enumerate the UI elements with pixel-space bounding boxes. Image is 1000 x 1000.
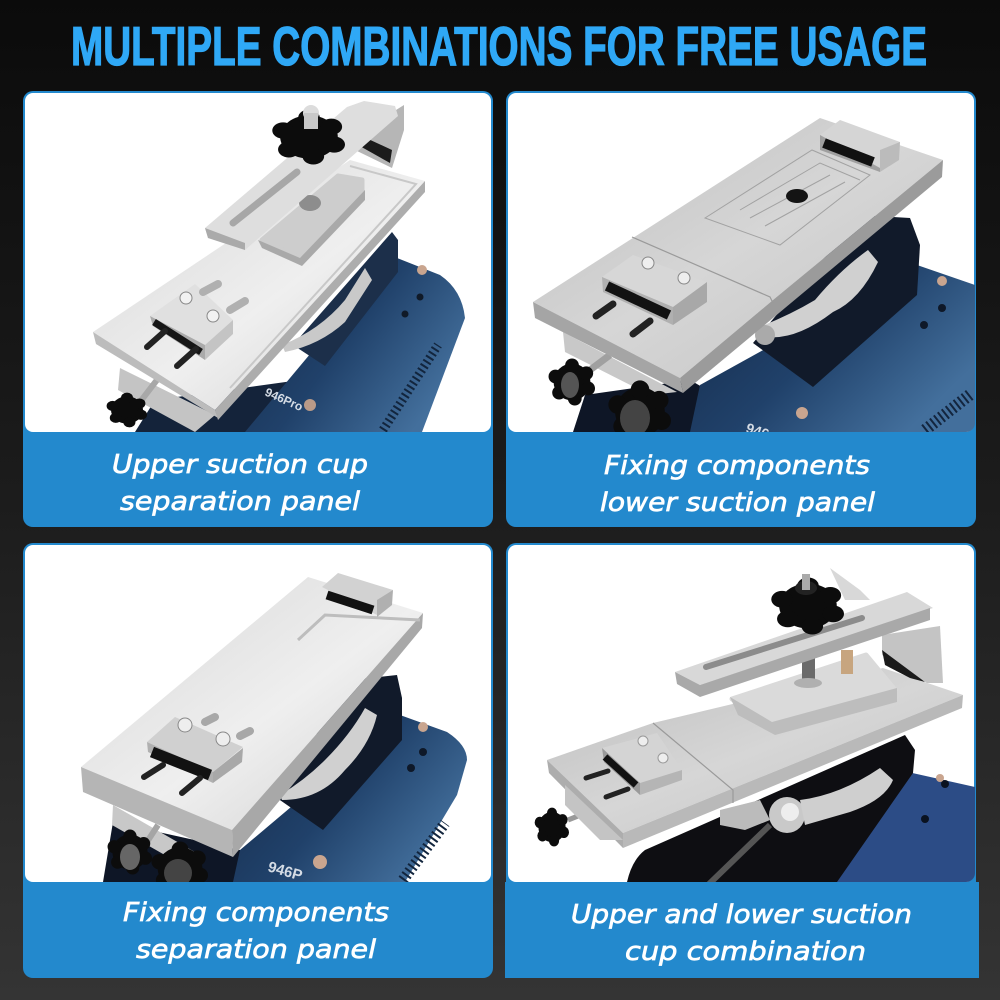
wheel clamp bbox=[769, 768, 893, 833]
panel: fixing components lower suction panel bbox=[506, 91, 976, 527]
icon: knob bbox=[771, 577, 844, 635]
caption: Fixing components bbox=[604, 451, 870, 481]
far clamp bbox=[836, 120, 900, 144]
caption: lower suction panel bbox=[600, 488, 876, 518]
brass post bbox=[841, 650, 853, 674]
clamp bbox=[150, 284, 233, 345]
plate pattern bbox=[705, 150, 870, 245]
icon: second knob bbox=[152, 842, 208, 882]
caption bbox=[600, 451, 876, 518]
panel: fixing components separation panel bbox=[23, 543, 493, 978]
caption: separation panel bbox=[120, 487, 361, 517]
photo: machine with lower suction plate bbox=[533, 118, 975, 444]
icon: side knob bbox=[549, 359, 595, 405]
model label: 946 bbox=[744, 420, 771, 442]
panel: upper suction cup separation panel bbox=[23, 91, 493, 527]
near clamp bbox=[602, 255, 707, 307]
icon: side knob bbox=[108, 830, 152, 874]
near clamp bbox=[147, 717, 243, 772]
icon: second knob bbox=[608, 380, 671, 432]
far clamp bbox=[322, 573, 393, 615]
photo: machine with both suction cups bbox=[535, 568, 975, 885]
icon: side knob bbox=[535, 808, 569, 846]
model label: 946Pro bbox=[263, 385, 305, 414]
puck bbox=[730, 652, 884, 718]
model label: 946P bbox=[266, 859, 304, 885]
caption bbox=[112, 450, 368, 517]
spring bbox=[802, 658, 815, 679]
caption: Upper suction cup bbox=[112, 450, 368, 480]
right bracket bbox=[882, 626, 943, 683]
photo: machine with flat plate bbox=[81, 573, 467, 895]
caption: cup combination bbox=[625, 937, 866, 967]
photo: machine with upper suction cup bbox=[93, 101, 465, 432]
arm bbox=[675, 592, 933, 685]
panel: upper and lower suction cup combination bbox=[505, 543, 979, 978]
icon: side knob bbox=[107, 393, 147, 427]
caption bbox=[505, 882, 979, 978]
arm bbox=[205, 101, 398, 250]
caption bbox=[123, 898, 389, 965]
plate bbox=[547, 668, 963, 833]
caption: separation panel bbox=[136, 935, 377, 965]
plate bbox=[533, 118, 943, 378]
caption: Upper and lower suction bbox=[571, 900, 912, 930]
plate bbox=[81, 577, 423, 830]
suction foot bbox=[262, 176, 362, 258]
caption: Fixing components bbox=[123, 898, 389, 928]
icon: knob bbox=[272, 109, 345, 165]
lower clamp bbox=[602, 733, 682, 783]
